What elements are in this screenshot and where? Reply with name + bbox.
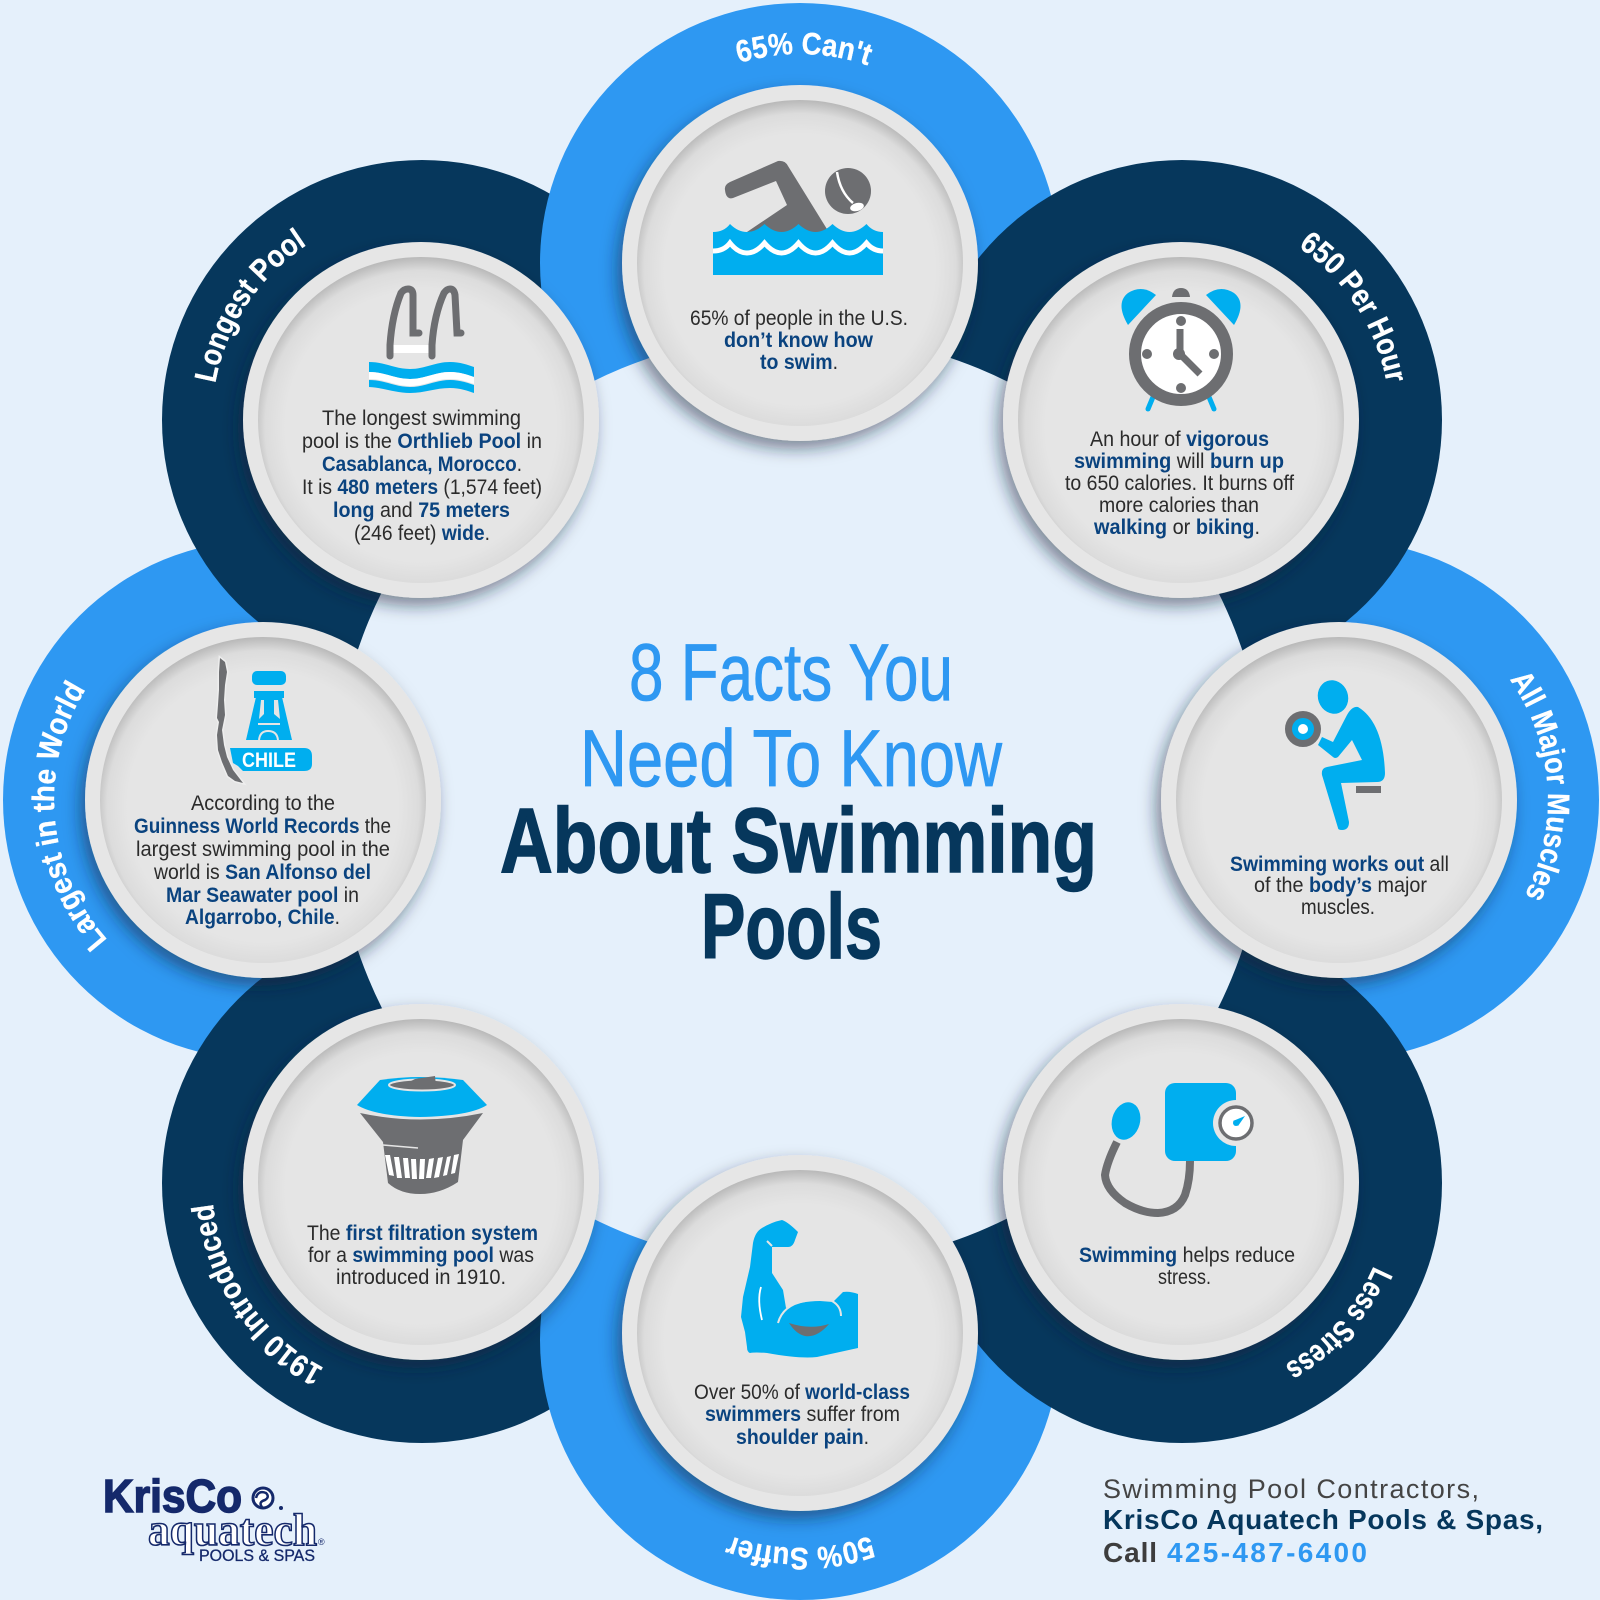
contact text: Call xyxy=(1103,1537,1157,1568)
fact text: for a swimming pool was xyxy=(308,1244,534,1267)
fact text: to 650 calories. It burns off xyxy=(1065,472,1294,495)
panel: 65% can't xyxy=(606,32,984,460)
icon: pool chlorine floater xyxy=(357,1076,487,1194)
fact text: shoulder pain. xyxy=(736,1426,869,1449)
fact text: The longest swimming xyxy=(322,407,521,430)
arc label: Largest in the World: Largest in the World xyxy=(31,680,107,952)
title: 8 Facts You xyxy=(629,628,953,718)
arc band: 65% can't xyxy=(540,3,1060,523)
fact text: Mar Seawater pool in xyxy=(166,884,359,907)
logo: KrisCo Aquatech: POOLS & SPAS xyxy=(199,1546,315,1565)
logo: KrisCo Aquatech xyxy=(103,1470,325,1565)
fact text: introduced in 1910. xyxy=(336,1266,506,1289)
circle badge xyxy=(243,242,599,598)
fact text: An hour of vigorous xyxy=(1090,428,1269,451)
icon: pool ladder and water xyxy=(369,289,474,393)
fact text: swimming will burn up xyxy=(1074,450,1284,473)
fact text xyxy=(302,407,542,545)
fact text: muscles. xyxy=(1301,896,1375,919)
fact text xyxy=(307,1222,538,1289)
panel: 1910 introduced xyxy=(190,1000,606,1384)
fact text xyxy=(1230,853,1449,919)
icon: logo swirl xyxy=(253,1488,283,1510)
circle badge xyxy=(1161,622,1517,978)
fact text: Over 50% of world-class xyxy=(694,1381,910,1404)
logo: KrisCo Aquatech: aquatech xyxy=(148,1504,317,1555)
arc label: Longest Pool: Longest Pool xyxy=(194,227,306,382)
fact text: pool is the Orthlieb Pool in xyxy=(302,430,542,453)
title: Need To Know xyxy=(580,714,1002,804)
fact text: Guinness World Records the xyxy=(134,815,391,838)
fact text xyxy=(694,1381,910,1449)
fact text xyxy=(1079,1244,1295,1289)
fact text: Algarrobo, Chile. xyxy=(185,906,340,929)
title: About Swimming xyxy=(500,790,1097,892)
fact text xyxy=(1065,428,1294,539)
fact text: world is San Alfonso del xyxy=(153,861,371,884)
label: CHILE: CHILE xyxy=(242,749,296,772)
icon: flexed arm xyxy=(741,1220,858,1358)
fact text bold xyxy=(724,329,874,374)
fact text: long and 75 meters xyxy=(333,499,510,522)
title xyxy=(500,628,1097,978)
panel: 650 per hour xyxy=(986,232,1403,618)
circle badge xyxy=(1003,242,1359,598)
fact text: The first filtration system xyxy=(307,1222,538,1245)
icon: swimmer xyxy=(713,161,883,275)
fact text: Swimming works out all xyxy=(1230,853,1449,876)
contact text: 425-487-6400 xyxy=(1167,1537,1367,1568)
arc band: all major muscles xyxy=(1079,540,1599,1060)
arc band: largest in the world xyxy=(3,540,523,1060)
fact text xyxy=(134,792,391,929)
contact text: KrisCo Aquatech Pools & Spas, xyxy=(1103,1504,1543,1535)
fact text: 65% of people in the U.S. xyxy=(690,307,908,330)
arc band: 50% suffer xyxy=(540,1080,1060,1600)
arc label: All Major Muscles: All Major Muscles xyxy=(1510,674,1570,900)
contact text: Swimming Pool Contractors, xyxy=(1103,1474,1479,1504)
fact text: largest swimming pool in the xyxy=(136,838,390,861)
fact text: Casablanca, Morocco. xyxy=(322,453,522,476)
fact text: of the body’s major xyxy=(1254,874,1427,897)
fact text: (246 feet) wide. xyxy=(354,522,490,545)
logo: KrisCo Aquatech: KrisCo xyxy=(103,1470,242,1522)
fact text: walking or biking. xyxy=(1093,516,1260,539)
circle badge xyxy=(243,1004,599,1360)
icon: person lifting dumbbell xyxy=(1288,676,1385,830)
arc label: Less Stress: Less Stress xyxy=(1286,1267,1393,1378)
panel: longest pool xyxy=(194,227,606,618)
fact text: Swimming helps reduce xyxy=(1079,1244,1295,1267)
fact text: stress. xyxy=(1158,1266,1211,1289)
icon: Chile map with tower xyxy=(217,658,312,783)
panel: 50% suffer xyxy=(606,1152,984,1570)
panel: all major muscles xyxy=(1144,619,1570,996)
arc band: 1910 introduced xyxy=(162,923,682,1443)
icon: alarm clock xyxy=(1122,288,1240,409)
fact text: According to the xyxy=(191,792,335,815)
fact text: swimmers suffer from xyxy=(705,1403,900,1426)
fact text bold: don’t know how xyxy=(724,329,874,352)
arc label: 65% Can't: 65% Can't xyxy=(736,32,872,66)
panel: less stress xyxy=(986,1000,1393,1378)
circle badge xyxy=(1003,1004,1359,1360)
contact text xyxy=(1103,1474,1543,1568)
arc label: 1910 Introduced: 1910 Introduced xyxy=(190,1205,323,1384)
fact text bold: to swim. xyxy=(760,351,838,374)
arc band: longest pool xyxy=(162,160,682,680)
arc label: 650 Per Hour: 650 Per Hour xyxy=(1302,232,1403,380)
fact text: It is 480 meters (1,574 feet) xyxy=(302,476,542,499)
title: Pools xyxy=(701,876,882,978)
arc band: less stress xyxy=(922,923,1442,1443)
circle badge xyxy=(622,85,978,441)
fact text: more calories than xyxy=(1099,494,1259,517)
logo: KrisCo Aquatech: ® xyxy=(318,1537,325,1547)
central background disc xyxy=(333,333,1267,1267)
circle badge xyxy=(622,1155,978,1511)
arc label: 50% Suffer: 50% Suffer xyxy=(725,1537,875,1570)
panel: largest in the world xyxy=(31,618,448,996)
circle badge xyxy=(85,622,441,978)
icon: blood pressure cuff xyxy=(1105,1083,1259,1213)
arc band: 650 per hour xyxy=(922,160,1442,680)
